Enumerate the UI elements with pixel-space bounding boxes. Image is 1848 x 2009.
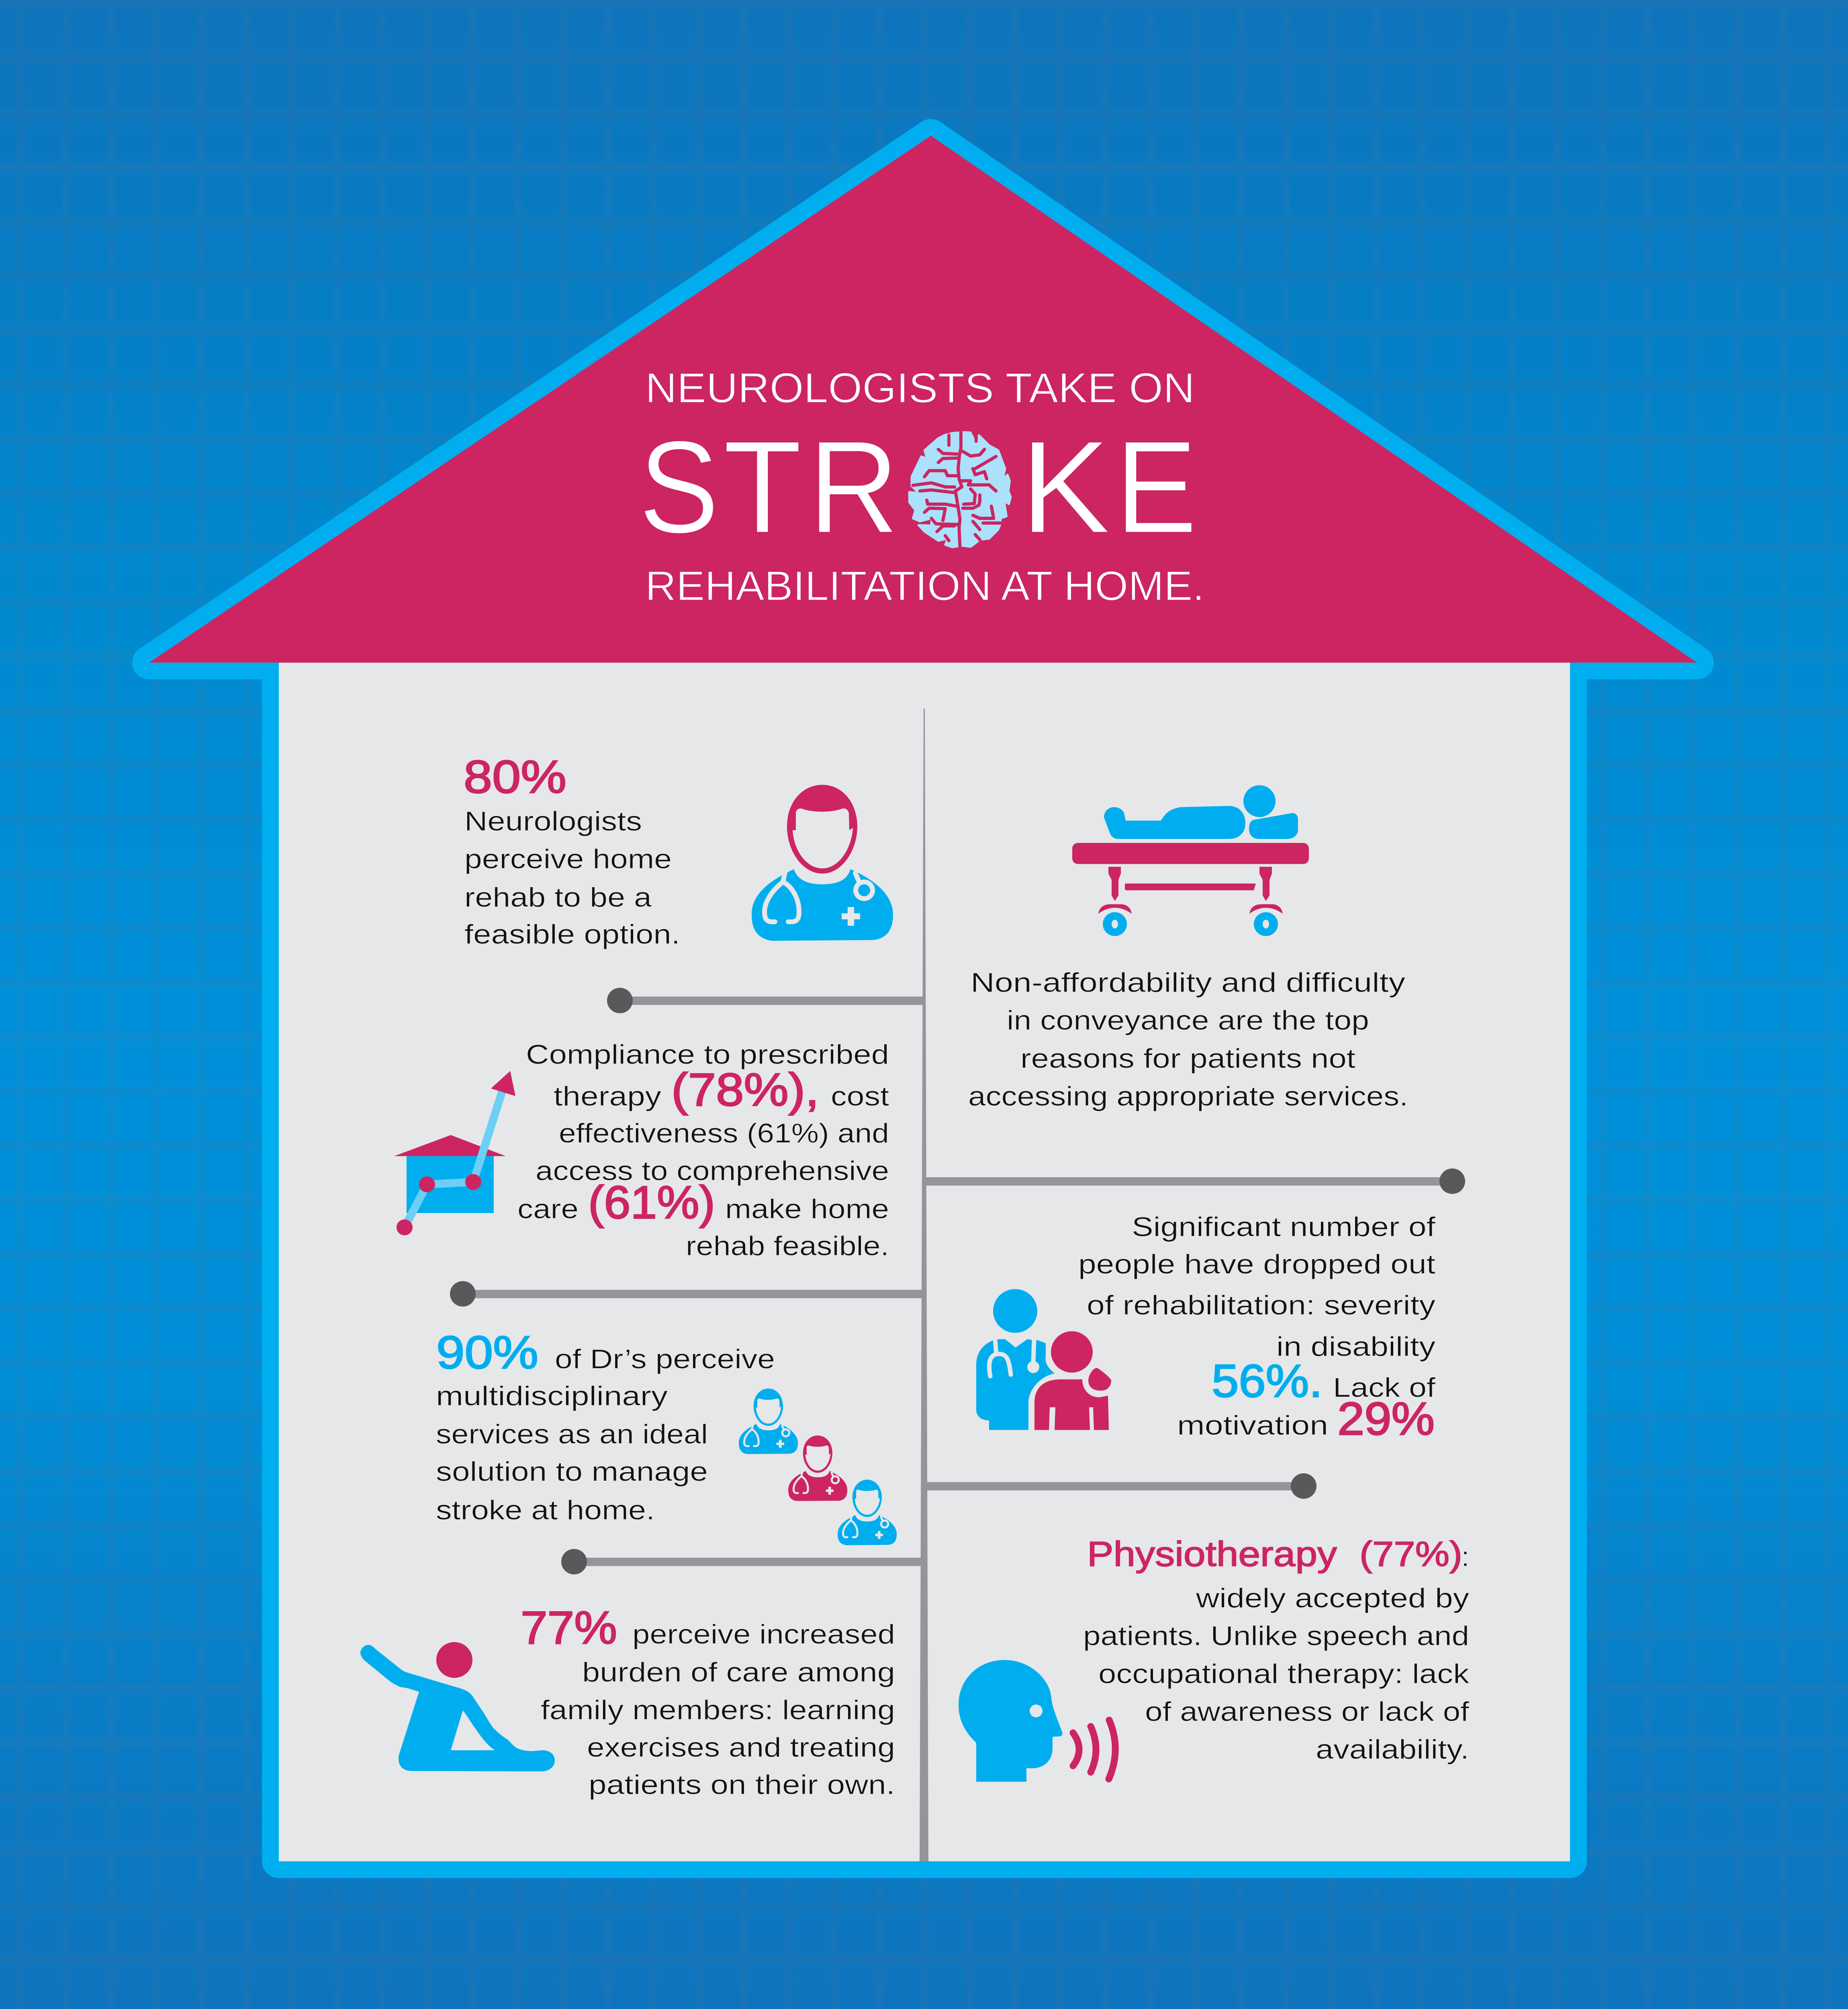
connector 1 [607, 988, 924, 1013]
text block: non-affordability: reasons for patients not [1020, 1044, 1355, 1074]
house interior panel [279, 663, 1570, 1862]
text block: compliance: access to comprehensive [536, 1156, 889, 1186]
house outline [149, 136, 1697, 1862]
text block: compliance: rehab feasible. [686, 1231, 889, 1261]
icon: doctor large [752, 785, 893, 941]
text block: non-affordability: accessing appropriate services. [968, 1082, 1408, 1112]
text block: 90%: solution to manage [436, 1457, 708, 1487]
central divider [920, 708, 928, 1862]
text block: physiotherapy: availability. [1316, 1735, 1469, 1765]
text block: physiotherapy [1083, 1534, 1469, 1765]
text block: dropped out: people have dropped out [1078, 1250, 1435, 1280]
text block: 77% burden: burden of care among [582, 1657, 895, 1688]
text block: dropped out: Significant number of [1132, 1212, 1435, 1242]
word: stroke: R [808, 413, 899, 561]
text block: compliance [517, 1040, 889, 1261]
icon: speaking head [959, 1660, 1115, 1782]
heading: physiotherapy: Physiotherapy [1087, 1534, 1337, 1573]
stat: 78%: (78%), [671, 1064, 819, 1115]
text block: 77% burden: family members: learning [541, 1695, 895, 1725]
text block: dropped out [1078, 1212, 1435, 1445]
word: stroke [639, 413, 1197, 561]
connector 2 [924, 1168, 1465, 1194]
word: stroke: T [723, 413, 802, 561]
stat: 56%: 56%. [1212, 1355, 1323, 1407]
icon: three doctors [739, 1389, 897, 1545]
text block: compliance: therapy [554, 1082, 661, 1112]
text block: 77% burden: exercises and treating [587, 1733, 895, 1763]
text block: non-affordability [968, 968, 1408, 1112]
doctor 3 [838, 1480, 897, 1545]
doctor 2 [788, 1436, 847, 1501]
text block: 77% burden: perceive increased [632, 1620, 895, 1650]
title line 1: NEUROLOGISTS TAKE ON [645, 365, 1195, 411]
text block: 80%: Neurologists [464, 806, 642, 837]
icon: brain [909, 431, 1011, 548]
text block: non-affordability: in conveyance are the top [1007, 1006, 1369, 1035]
text block: 77% burden [521, 1602, 895, 1800]
text block: non-affordability: Non-affordability and difficulty [971, 968, 1405, 998]
text block: 80% [464, 751, 680, 949]
text block: 90% [436, 1327, 775, 1526]
text block: physiotherapy: of awareness or lack of [1145, 1697, 1469, 1727]
text block: dropped out: Lack of [1333, 1373, 1435, 1403]
icon: patient on stretcher [1072, 785, 1309, 936]
text block: compliance: effectiveness (61%) and [559, 1119, 889, 1149]
text block: physiotherapy: patients. Unlike speech and [1083, 1621, 1469, 1651]
stat: 61%: (61%) [588, 1176, 715, 1228]
text block: 90%: stroke at home. [436, 1495, 655, 1526]
icon: doctor and patient [976, 1289, 1111, 1430]
text block: 80%: rehab to be a [464, 883, 652, 912]
text block: dropped out: motivation [1177, 1411, 1328, 1441]
word: stroke: K [1020, 413, 1110, 561]
doctor 1 [739, 1389, 798, 1454]
text block: 80%: feasible option. [464, 920, 680, 949]
text block: compliance: make home [725, 1194, 889, 1224]
text block: 90%: services as an ideal [436, 1420, 708, 1449]
title line 3: REHABILITATION AT HOME. [645, 563, 1204, 609]
text block: dropped out: of rehabilitation: severity [1087, 1291, 1435, 1321]
connector 5 [561, 1549, 924, 1574]
text block: dropped out: in disability [1276, 1332, 1435, 1362]
text block: physiotherapy: occupational therapy: lack [1098, 1659, 1469, 1689]
stat: 29%: 29% [1337, 1393, 1435, 1445]
text block: 80%: perceive home [464, 845, 672, 874]
stat: 80%: 80% [464, 751, 566, 803]
text block: 90%: multidisciplinary [436, 1381, 668, 1411]
text block: physiotherapy: widely accepted by [1196, 1583, 1469, 1614]
connector 3 [450, 1281, 924, 1307]
icon: stretching person [360, 1642, 555, 1772]
connector 4 [924, 1473, 1316, 1499]
roof [149, 136, 1697, 663]
text block: compliance: Compliance to prescribed [526, 1040, 889, 1070]
icon: house with rising chart [394, 1071, 515, 1235]
stat: 77%: (77%) [1359, 1534, 1462, 1573]
stat: 77%: 77% [521, 1602, 617, 1654]
word: stroke: E [1115, 413, 1197, 561]
text block: physiotherapy: : [1462, 1542, 1469, 1572]
text block: 77% burden: patients on their own. [589, 1770, 895, 1800]
word: stroke: S [639, 413, 719, 561]
text block: compliance: cost [831, 1082, 889, 1112]
title [639, 365, 1204, 609]
text block: compliance: care [517, 1194, 579, 1224]
text block: 90%: of Dr’s perceive [555, 1344, 775, 1374]
stat: 90%: 90% [436, 1327, 538, 1378]
